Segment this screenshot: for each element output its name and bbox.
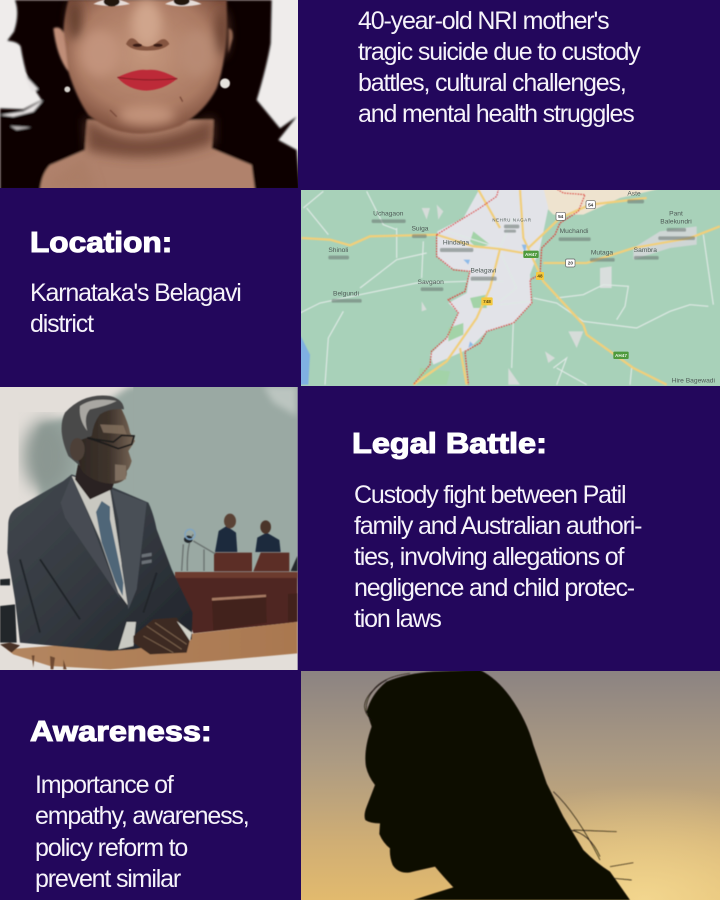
text block: location detail: [30, 279, 241, 338]
map place labels: Savgaon: [418, 279, 444, 286]
text block: location detail: Karnataka's Belagavi: [30, 279, 241, 307]
road shields: 20: [568, 261, 573, 266]
map place labels: Balekundri: [660, 219, 692, 226]
text block: legal battle detail: [354, 481, 642, 633]
heading: Legal Battle: Legal Battle:: [352, 428, 547, 460]
map place labels: Belagavi: [471, 268, 497, 275]
road shields: AH47: [615, 353, 627, 358]
courtroom bench: [175, 572, 297, 633]
map place labels: Hindalga: [443, 239, 469, 246]
text block: awareness detail: prevent similar: [35, 865, 180, 893]
map place labels: Suiga: [411, 226, 429, 233]
map place labels: NEHRU NAGAR: [492, 217, 532, 222]
text block: legal battle detail: negligence and child protec-: [354, 574, 634, 602]
map place labels: Hire Bagewadi: [672, 377, 715, 384]
road shields: [481, 201, 629, 359]
road shields: 54: [588, 202, 594, 207]
heading: Awareness: Awareness:: [30, 716, 212, 748]
map place labels: Sambra: [634, 247, 657, 254]
text block: intro summary: and mental health struggles: [358, 100, 634, 128]
map place labels: [328, 190, 715, 384]
map place labels: Aste: [627, 190, 641, 197]
text block: legal battle detail: tion laws: [354, 605, 441, 633]
map place labels: Pant: [669, 211, 683, 218]
road shields: AH47: [525, 252, 537, 257]
heading: Location: Location:: [30, 227, 172, 259]
text block: intro summary: battles, cultural challenges,: [358, 69, 626, 97]
man: hands: [118, 622, 136, 649]
panel: silhouette photo: [301, 671, 720, 900]
panel: portrait photo: [0, 0, 298, 188]
man: suit: [7, 474, 193, 651]
text block: legal battle detail: ties, involving allegations of: [354, 543, 623, 571]
map place labels: Uchagaon: [373, 211, 404, 218]
panel: courtroom illustration: [0, 387, 298, 670]
text block: intro summary: 40-year-old NRI mother's: [358, 7, 608, 35]
road shields: 48: [537, 274, 543, 279]
text block: legal battle detail: Custody fight between Patil: [354, 481, 625, 509]
woman's silhouette: [365, 670, 633, 900]
man: neck and head: [75, 463, 117, 499]
road shields: 748: [483, 299, 491, 304]
text block: intro summary: [167, 2, 641, 128]
text block: intro summary: tragic suicide due to custody: [358, 38, 640, 66]
road shields: 54: [558, 214, 564, 219]
text block: awareness detail: empathy, awareness,: [35, 802, 249, 830]
text block: location detail: district: [30, 310, 93, 338]
text block: legal battle detail: family and Australian authori-: [354, 512, 641, 540]
table top: [7, 622, 297, 669]
map place labels: Mutaga: [591, 249, 613, 256]
map: Belagavi district: [301, 190, 720, 386]
map place labels: Muchandi: [560, 228, 589, 235]
text block: awareness detail: policy reform to: [35, 834, 187, 862]
map place labels: Belgundi: [333, 290, 359, 297]
text block: awareness detail: [35, 771, 249, 893]
text block: awareness detail: Importance of: [35, 771, 173, 799]
map place labels: Shinoli: [328, 247, 349, 254]
